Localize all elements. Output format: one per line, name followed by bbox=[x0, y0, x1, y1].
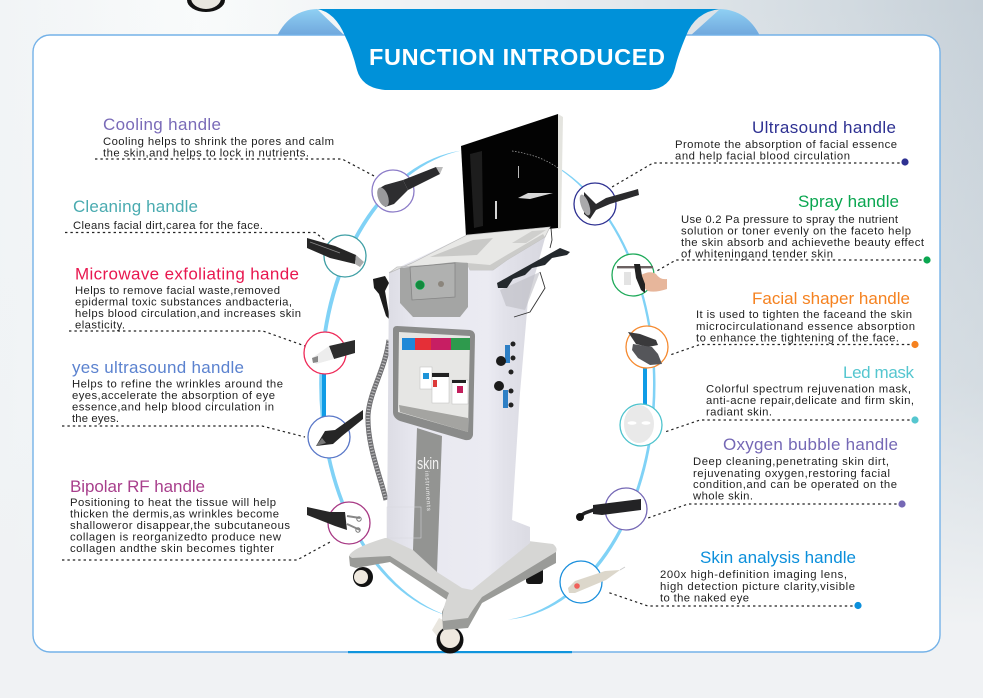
icon: face mask bbox=[624, 405, 654, 443]
callout: cooling handle bbox=[95, 115, 443, 212]
faint label box bbox=[387, 507, 421, 538]
title banner bbox=[317, 9, 720, 90]
icon: ultrasound wand bbox=[577, 189, 639, 219]
callout: facial shaper handle: Facial shaper handle bbox=[752, 289, 910, 308]
grey T stem with logo bbox=[413, 428, 442, 572]
callout: cooling handle: the skin,and helps to lock in nutrients. bbox=[103, 148, 309, 160]
icon: skin analyzer pen bbox=[568, 567, 625, 593]
dot bbox=[911, 341, 919, 348]
icon: cleaning wand bbox=[307, 238, 364, 267]
callout: bipolar RF handle: thicken the dermis,as wrinkles become bbox=[70, 508, 279, 520]
dot bbox=[911, 416, 919, 424]
decorative cropped product fragment at top bbox=[187, 0, 225, 12]
callout: cooling handle: Cooling handle bbox=[103, 115, 221, 134]
callout: oxygen bubble handle bbox=[576, 435, 906, 530]
callout: spray handle: Use 0.2 Pa pressure to spray the nutrient bbox=[681, 214, 899, 226]
dot bbox=[923, 256, 931, 264]
callout: bipolar RF handle: collagen is reorganizedto produce new bbox=[70, 532, 282, 544]
callout: cleaning handle: Cleans facial dirt,carea for the face. bbox=[73, 220, 263, 232]
callout: ultrasound handle: and help facial blood circulation bbox=[675, 150, 850, 162]
callout: skin analysis handle: to the naked eye bbox=[660, 592, 749, 604]
control panel bbox=[400, 262, 468, 317]
side connectors bbox=[494, 342, 516, 408]
callout: cooling handle: Cooling helps to shrink the pores and calm bbox=[103, 136, 334, 148]
icon: cooling wand bbox=[375, 167, 443, 208]
dot bbox=[898, 500, 906, 508]
callout: yes ultrasound handle: essence,and help blood circulation in bbox=[72, 402, 274, 414]
callout: bipolar RF handle: Positioning to heat the tissue will help bbox=[70, 497, 276, 509]
callout: oxygen bubble handle: whole skin. bbox=[692, 490, 753, 502]
icon: spray gun with hand bbox=[617, 264, 667, 293]
callout: yes ultrasound handle: eyes,accelerate the absorption of eye bbox=[72, 390, 275, 402]
right handle rack bbox=[497, 228, 570, 317]
callout: microwave exfoliating handle: Microwave exfoliating hande bbox=[75, 264, 299, 284]
callout: yes ultrasound handle: the eyes. bbox=[72, 413, 119, 425]
callout: microwave exfoliating handle bbox=[69, 264, 355, 374]
callout: spray handle: solution or toner evenly on the faceto help bbox=[681, 226, 911, 238]
callout: spray handle: the skin absorb and achievethe beauty effect bbox=[681, 237, 925, 249]
icon: eye wand bbox=[316, 410, 363, 446]
callout: yes ultrasound handle: yes ultrasound handle bbox=[72, 358, 244, 377]
machine: skin care device bbox=[349, 114, 570, 654]
callout: ultrasound handle: Ultrasound handle bbox=[752, 118, 896, 137]
callout: skin analysis handle: Skin analysis handle bbox=[700, 548, 856, 567]
callout: microwave exfoliating handle: Helps to remove facial waste,removed bbox=[75, 285, 280, 297]
grey T stem with logo: instruments bbox=[423, 471, 431, 511]
callout: LED mask: Colorful spectrum rejuvenation mask, bbox=[706, 384, 911, 396]
top console bbox=[389, 227, 550, 273]
callout: oxygen bubble handle: Deep cleaning,penetrating skin dirt, bbox=[693, 456, 889, 468]
icon: oxygen wand bbox=[576, 499, 641, 521]
icon: microwave wand bbox=[312, 340, 355, 364]
callout: microwave exfoliating handle: elasticity. bbox=[75, 320, 125, 332]
callout: skin analysis handle: 200x high-definition imaging lens, bbox=[660, 569, 847, 581]
hose bbox=[368, 340, 389, 500]
grey T stem with logo: skin bbox=[417, 454, 439, 473]
dot bbox=[854, 602, 862, 609]
casters bbox=[353, 567, 543, 654]
callout: facial shaper handle: microcirculationand essence absorption bbox=[696, 321, 915, 333]
callout: bipolar RF handle bbox=[62, 477, 370, 560]
icon: facial shaper bbox=[628, 332, 662, 365]
heading: function introduced: FUNCTION INTRODUCED bbox=[369, 44, 665, 70]
callout: bipolar RF handle: Bipolar RF handle bbox=[70, 477, 205, 496]
callout: microwave exfoliating handle: helps blood circulation,and increases skin bbox=[75, 308, 301, 320]
machine body bbox=[387, 227, 550, 590]
callout: facial shaper handle: to enhance the tightening of the face. bbox=[696, 332, 899, 344]
callout: spray handle: Spray handle bbox=[798, 192, 899, 211]
callout: cleaning handle bbox=[65, 197, 366, 277]
callout: spray handle: of whiteningand tender skin bbox=[681, 248, 833, 260]
callout: microwave exfoliating handle: epidermal toxic substances andbacteria, bbox=[75, 296, 292, 308]
callout: LED mask bbox=[620, 363, 919, 446]
callout: oxygen bubble handle: condition,and can be operated on the bbox=[693, 479, 897, 491]
callout: facial shaper handle: It is used to tighten the faceand the skin bbox=[696, 309, 912, 321]
monitor bbox=[461, 114, 563, 237]
base bbox=[349, 538, 557, 630]
callout: bipolar RF handle: shalloweror disappear,the subcutaneous bbox=[70, 520, 290, 532]
callout: ultrasound handle bbox=[574, 118, 909, 225]
callout: skin analysis handle: high detection picture clarity,visible bbox=[660, 581, 855, 593]
icon: bipolar wand bbox=[307, 507, 361, 532]
dot bbox=[901, 158, 909, 166]
callout: yes ultrasound handle bbox=[62, 358, 363, 458]
bottle window bbox=[393, 326, 475, 440]
callout: facial shaper handle bbox=[626, 289, 919, 368]
callout: ultrasound handle: Promote the absorption of facial essence bbox=[675, 139, 897, 151]
callout: LED mask: radiant skin. bbox=[706, 406, 772, 418]
callout: bipolar RF handle: collagen andthe skin becomes tighter bbox=[70, 543, 274, 555]
callout: oxygen bubble handle: rejuvenating oxygen,restoring facial bbox=[693, 468, 890, 480]
callout: skin analysis handle bbox=[560, 548, 862, 609]
callout: yes ultrasound handle: Helps to refine the wrinkles around the bbox=[72, 378, 283, 390]
left holder handle bbox=[373, 276, 390, 320]
callout: oxygen bubble handle: Oxygen bubble handle bbox=[723, 435, 898, 454]
callout: spray handle bbox=[612, 192, 931, 296]
callout: LED mask: anti-acne repair,delicate and firm skin, bbox=[706, 395, 914, 407]
callout: cleaning handle: Cleaning handle bbox=[73, 197, 198, 216]
decorative oval arc bbox=[319, 151, 656, 620]
callout: LED mask: Led mask bbox=[843, 363, 914, 382]
banner side lobes bbox=[277, 9, 760, 36]
